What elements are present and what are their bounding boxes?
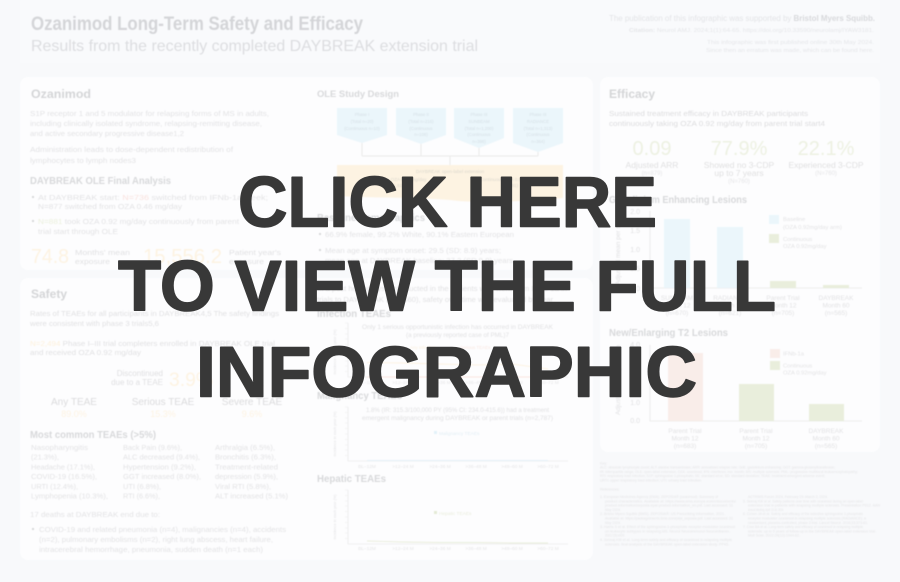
line chart: malignancy TEAEs: >24–36 M: [429, 464, 451, 470]
line chart: malignancy TEAEs: >36–48 M: [465, 464, 487, 470]
text: analysis bullets: trial start through OLE: [38, 227, 118, 236]
line chart: infection TEAEs: Serious TEAEs: [460, 345, 491, 350]
heading: infection TEAEs: Infection TEAEs: [317, 309, 391, 320]
bar labels: RADIANCE: [713, 295, 747, 302]
line chart: hepatic TEAEs: Incidence in each year (%): [333, 494, 337, 539]
heading: Safety: Safety: [31, 287, 67, 301]
bar labels: Month 12: [769, 302, 797, 310]
text: TEAE rates: Rates of TEAEs for all participants in DAYBREAK4,5 The safety findings: [30, 309, 279, 318]
publication note: This infographic was first published online 30th May 2024.: [707, 40, 875, 46]
line chart: infection TEAEs: >48–60 M: [501, 380, 523, 386]
line chart: malignancy TEAEs: [333, 407, 568, 470]
stat: adjusted ARR: Adjusted ARR: [626, 160, 678, 170]
bar chart: new/enlarging T2 lesions: 2.0: [630, 380, 640, 387]
text: ozanimod description: Administration leads to dose-dependent redistribution of: [30, 145, 234, 154]
bar chart: gadolinium enhancing lesions: 1.5: [630, 228, 640, 235]
list: most common TEAEs: [31, 443, 288, 500]
call to action overlay: [118, 162, 776, 412]
phase III radiance box: RADIANCE: [527, 119, 549, 124]
stat: patient years exposure: 15,556.2: [143, 246, 222, 268]
bar chart: new/enlarging T2 lesions: 1.0: [630, 400, 640, 407]
text: post hoc analysis: trials to DAYBREAK (n=1,560), safety over time was evaluated by year: [317, 295, 554, 304]
bar labels: Parent Trial: [668, 428, 702, 435]
text: ozanimod description: including clinically isolated syndrome, relapsing-remitting disease,: [30, 119, 262, 128]
stat: months mean exposure: Months' mean: [75, 248, 130, 257]
text: TEAE rates: [29, 309, 279, 357]
footnotes: references: sclerosis: final analysis of the DAYBREAK open-label extension study. PP45.: [605, 542, 729, 546]
bar chart: new/enlarging T2 lesions: 3.0: [630, 361, 640, 368]
phase III radiance box: [513, 108, 563, 152]
overlay line 2: TO VIEW THE FULL: [118, 246, 776, 326]
overlay line 3: INFOGRAPHIC: [196, 332, 697, 412]
legend: [770, 349, 827, 376]
list: most common TEAEs: UTI (6.8%),: [123, 482, 161, 491]
stat: no 3-CDP: 77.9%: [711, 138, 768, 160]
bar chart: gadolinium enhancing lesions: 2.0: [630, 209, 640, 216]
stat: serious TEAE: Serious TEAE: [132, 397, 195, 408]
footnotes: references: Available at: https://packageinserts.bms.com/pi/pi_zeposia.pdf. Last accessed: 31: [605, 516, 733, 520]
text: deaths: intracerebral hemorrhage, pneumonia, sudden death (n=1 each): [39, 545, 263, 554]
list: most common TEAEs: ALC decreased (9.4%),: [123, 452, 200, 462]
line chart: infection TEAEs: >36–48 M: [465, 380, 487, 386]
line chart: malignancy TEAEs: Incidence in each year (%): [333, 411, 337, 456]
DAYBREAK extension box: DAYBREAK open-label extension: [416, 169, 485, 174]
bar chart: new/enlarging T2 lesions: Adjusted mean per scan: [615, 345, 622, 415]
heading: Ozanimod: Ozanimod: [31, 87, 91, 101]
stat: experienced 3-CDP: 22.1%: [798, 138, 855, 160]
bar chart: gadolinium enhancing lesions: Adjusted mean per scan: [615, 215, 622, 285]
heading: malignancy TEAEs: Malignancy TEAEs: [317, 391, 402, 402]
list: most common TEAEs: Lymphopenia (10.3%),: [31, 492, 108, 500]
stat: any TEAE: [51, 397, 97, 419]
line chart: hepatic TEAEs: BL–12M: [358, 546, 376, 552]
text: efficacy summary: [609, 109, 825, 128]
stat: experienced 3-CDP: [788, 138, 864, 177]
bar labels: [668, 428, 844, 450]
bar chart: new/enlarging T2 lesions: 0.0: [630, 418, 640, 425]
phase I box: Phase I: [355, 112, 369, 117]
stat: serious TEAE: [132, 397, 195, 419]
text: efficacy summary: Sustained treatment efficacy in DAYBREAK participants: [609, 109, 808, 118]
phase III box: [454, 108, 504, 148]
bar chart: gadolinium enhancing lesions: 0.0: [630, 286, 640, 293]
phase III radiance box: (Continuous: [526, 132, 550, 137]
line chart: hepatic TEAEs: >36–48 M: [465, 546, 487, 552]
text: demographics bullets: mean age at DAYBREAK baseline: 37.2 (SD 9.0) years: [325, 256, 513, 265]
stat: no 3-CDP: up to 7 years: [714, 168, 764, 178]
legend: (OZA 0.92mg/day arm): [783, 225, 842, 231]
phase III box: n=398): [472, 139, 486, 144]
footnotes: references: Mult Scler. 2022;28(12):1944-62.: [748, 534, 800, 538]
phase II box: Phase II: [413, 112, 429, 117]
line chart: hepatic TEAEs: [333, 490, 568, 552]
panel: Ozanimod and OLE study design: [20, 77, 593, 270]
stat: serious TEAE: 15.3%: [150, 409, 176, 419]
text: analysis bullets: N=881 took OZA 0.92 mg/day continuously from parent: [38, 217, 239, 226]
footnotes: key: URTI: upper respiratory tract infection; UTI: urinary tract infection.: [600, 478, 702, 482]
heading: hepatic TEAEs: Hepatic TEAEs: [317, 474, 386, 485]
stat: severe TEAE: 9.6%: [242, 409, 262, 419]
citation: Citation: Neurol AMJ. 2024;1(1):64-65. https://doi.org/10.33590/neurolamj/IYAW3181.: [629, 28, 875, 34]
legend: Continuous: [783, 237, 812, 243]
line chart: malignancy TEAEs: BL–12M: [358, 464, 376, 470]
heading: DAYBREAK OLE final analysis: DAYBREAK OLE Final Analysis: [30, 176, 171, 187]
phase I box: (Continuous n=10): [344, 126, 380, 131]
legend: OZA 0.92mg/day: [783, 244, 827, 250]
list: most common TEAEs: ALT increased (5.1%): [215, 492, 288, 500]
text: ozanimod description: lymphocytes to lymph nodes3: [30, 156, 136, 165]
legend: OZA 0.92mg/day: [783, 370, 827, 376]
footnotes: references: extension trial in patients with relapsing multiple sclerosis. Presentation P012. AAN: [748, 504, 880, 508]
phase III box: SUNBEAM: [468, 119, 490, 124]
text: infection note: [362, 324, 554, 339]
phase III radiance box: (Total n=1,313): [524, 126, 553, 131]
footnotes: key: [600, 462, 858, 482]
footnotes: references: 4. Selmaj KW et al. Long-term safety and efficacy of ozanimod in relapsing multiple: [600, 538, 732, 542]
bar labels: DAYBREAK: [809, 428, 844, 435]
list: most common TEAEs: GGT increased (8.0%),: [123, 472, 201, 481]
footnotes: references: May 2024.: [605, 521, 621, 525]
phase III box: (Total n=1,200): [465, 126, 494, 131]
sponsor note: The publication of this infographic was supported by Bristol Myers Squibb.: [609, 14, 875, 23]
text: demographics bullets: [319, 230, 514, 265]
bar labels: Month 12: [742, 436, 770, 442]
footnotes: references: product characteristics. Available at: https://www.ema.europa.eu/en/documents/: [605, 499, 736, 503]
list: most common TEAEs: COVID-19 (16.5%),: [31, 472, 97, 481]
text: analysis bullets: [32, 193, 268, 236]
footnotes: references: receptor modulator ozanimod in relapsing multiple sclerosis (RADIANCE): a: [748, 516, 866, 520]
line chart: infection TEAEs: Incidence in each year (%): [333, 329, 337, 374]
stat: months mean exposure: 74.8: [31, 246, 69, 268]
stat: adjusted ARR: [626, 138, 678, 177]
flow diagram: study design: [337, 108, 563, 202]
text: malignancy note: emergent malignancy during DAYBREAK or parent trials (n=2,787): [362, 415, 553, 422]
bar labels: Month 12: [716, 302, 744, 310]
DAYBREAK extension box: [337, 165, 563, 202]
stat: no 3-CDP: (N=760): [728, 179, 750, 185]
text: ozanimod description: [30, 109, 269, 165]
line chart: hepatic TEAEs: >60–72 M: [537, 546, 559, 552]
line chart: infection TEAEs: BL–12M: [358, 380, 376, 386]
line chart: infection TEAEs: >12–24 M: [392, 380, 414, 386]
heading: Efficacy: Efficacy: [609, 87, 655, 101]
phase II box: (Continuous: [409, 126, 433, 131]
stat: months mean exposure: [31, 246, 130, 268]
list: most common TEAEs: depression (5.9%),: [215, 472, 278, 481]
bar labels: (n=565): [815, 443, 837, 450]
footnotes: references: sclerosis: up to 5 years of follow-up in the DAYBREAK open-label extension trial.: [748, 529, 876, 533]
stat: discontinued due to TEAE: Discontinued: [117, 369, 163, 378]
text: TEAE rates: were consistent with phase 3 trials5,6: [29, 319, 159, 328]
DAYBREAK extension box: (n=881): [502, 183, 518, 188]
overlay line 1: CLICK HERE: [238, 162, 657, 242]
footnotes: references: References:: [600, 488, 619, 492]
stat: discontinued due to TEAE: due to a TEAE: [111, 378, 163, 387]
line chart: hepatic TEAEs: >24–36 M: [429, 546, 451, 552]
line chart: malignancy TEAEs: >60–72 M: [537, 464, 559, 470]
phase III radiance box: Phase III: [530, 112, 546, 117]
list: most common TEAEs: Arthralgia (6.5%),: [215, 443, 275, 452]
stat: severe TEAE: Severe TEAE: [222, 397, 283, 408]
footnotes: references: 1. European Medicines Agency (EMA). ZEPOSIA® (ozanimod): Summary of: [600, 495, 718, 499]
list: most common TEAEs: Bronchitis (6.3%),: [215, 452, 276, 462]
panel: Efficacy: [600, 77, 880, 452]
footnotes: references: 6. Cohen JA et al. Safety and efficacy of the selective sphingosine 1-phosphate: [743, 512, 863, 516]
phase I box: (Total n=20): [351, 119, 374, 124]
heading: gadolinium enhancing lesions: Gadolinium Enhancing Lesions: [609, 195, 747, 206]
phase II box: n=108): [414, 132, 428, 137]
legend: [769, 215, 842, 250]
bar labels: Parent Trial: [766, 295, 800, 302]
legend: IFNb-1a: [783, 352, 805, 358]
text: deaths: COVID-19 and related pneumonia (n=4), malignancies (n=4), accidents: [39, 525, 286, 534]
footnotes: key: Key:: [600, 462, 607, 466]
footnotes: references: Annual Meeting, April 13-18, 2024.: [748, 508, 784, 512]
text: deaths: 17 deaths at DAYBREAK end due to:: [30, 510, 160, 519]
bar labels: Month 12: [663, 302, 691, 310]
footnotes: references: on leukocyte subtypes in relapsing MS. Neurol Neuroimmunol Neuroinflamm.: [605, 529, 730, 533]
stat: months mean exposure: exposure: [75, 257, 110, 266]
subtitle: Results from the recently completed DAYBREAK extension trial: [31, 38, 478, 55]
heading: new/enlarging T2 lesions: New/Enlarging T2 Lesions: [609, 328, 728, 339]
footnotes: references: product-information/zeposia-epar-product-information_en.pdf. Last accessed: 31: [605, 504, 733, 508]
stat: any TEAE: Any TEAE: [51, 397, 97, 408]
line chart: infection TEAEs: Any infection: [410, 345, 436, 350]
text: deaths: [30, 510, 286, 554]
stat: discontinued due to TEAE: 3.9%: [169, 370, 213, 391]
footnotes: references: ACTRIMS Forum 2024, February 29–March 2, 2024.: [748, 495, 828, 499]
footnotes: key: ALC: absolute lymphocyte count; ALT: alanine transaminase; ARR: annualised relapse rate; GdE: gadolinium-enhancing; GGT: gamma-glutamyltransferase;: [600, 466, 835, 470]
heading: baseline demographics: Baseline Demographics: [317, 213, 425, 224]
phase III radiance box: n=364): [531, 139, 545, 144]
list: most common TEAEs: RTI (6.6%),: [123, 492, 160, 500]
stat: experienced 3-CDP: (N=760): [815, 171, 837, 177]
footnotes: references: randomised, placebo-controlled, phase 3 trial. Lancet Neurol. 2016;15:373-81.: [748, 521, 868, 525]
footnotes: references: 7. Cree BA et al. Long-term safety and efficacy of ozanimod in relapsing multiple: [743, 525, 863, 529]
stat: adjusted ARR: (n=879): [642, 171, 662, 177]
stat: experienced 3-CDP: Experienced 3-CDP: [788, 160, 864, 170]
DAYBREAK extension box: Switched to OZA 0.92 mg/day: [366, 177, 427, 182]
bar labels: (n=705): [745, 443, 767, 450]
bar chart: gadolinium enhancing lesions: 1.0: [630, 247, 640, 254]
phase II box: (Total n=216): [408, 119, 434, 124]
text: malignancy note: [362, 407, 553, 422]
stat: no 3-CDP: Showed no 3-CDP: [704, 160, 775, 170]
panel: Safety: [20, 278, 593, 560]
list: most common TEAEs: Nasopharyngitis: [31, 443, 88, 452]
bar labels: [661, 295, 854, 317]
phase I box: [337, 108, 387, 143]
legend: Baseline: [783, 217, 805, 223]
line chart: malignancy TEAEs: >48–60 M: [501, 464, 523, 470]
text: post hoc analysis: In a post hoc analysis conducted in the patients who went from IFNb-1a in: [317, 284, 567, 293]
stat: patient years exposure: [143, 246, 281, 268]
list: most common TEAEs: Hypertension (9.2%),: [123, 462, 196, 472]
heading: most common TEAEs: Most common TEAEs (>5%): [30, 430, 156, 441]
line chart: malignancy TEAEs: >12–24 M: [392, 464, 414, 470]
bar labels: DAYBREAK: [819, 295, 854, 302]
stat: patient years exposure: exposure: [229, 257, 264, 266]
text: TEAE rates: and received OZA 0.92 mg/day: [30, 348, 141, 357]
text: ozanimod description: S1P receptor 1 and 5 modulator for relapsing forms of MS in adults,: [30, 109, 269, 118]
bar labels: (n=565): [825, 310, 847, 317]
line chart: infection TEAEs: >24–36 M: [429, 380, 451, 386]
text: demographics bullets: 66.9% female, 99.2% White, 90.1% Eastern European: [325, 230, 514, 239]
text: efficacy summary: continuously taking OZA 0.92 mg/day from parent trial start4: [609, 119, 825, 128]
line chart: hepatic TEAEs: >12–24 M: [392, 546, 414, 552]
footnotes: references: 3. Harris S et al. Effect of the sphingosine-1-phosphate receptor modulator ozanimod: [600, 525, 735, 529]
list: most common TEAEs: (21.3%),: [31, 452, 59, 462]
stat: patient years exposure: Patient year's: [229, 248, 281, 257]
bar chart: gadolinium enhancing lesions: [615, 209, 862, 317]
stat: severe TEAE: [222, 397, 283, 419]
text: TEAE rates: N=2,494 Phase I–III trial completers enrolled in DAYBREAK OLE trial: [30, 339, 275, 348]
stat: discontinued due to TEAE: [111, 369, 213, 391]
text: post hoc analysis: [317, 284, 567, 304]
list: most common TEAEs: Headache (17.1%),: [31, 462, 95, 472]
DAYBREAK extension box: (N=1,613): [386, 183, 407, 188]
text: deaths: (n=2), pulmonary embolisms (n=2), right lung abscess, heart failure,: [39, 535, 273, 544]
title: Ozanimod Long-Term Safety and Efficacy: [31, 14, 363, 35]
stat: any TEAE: 89.0%: [61, 409, 87, 419]
bar labels: Month 60: [822, 302, 850, 310]
footnotes: references: May 2024.: [605, 508, 621, 512]
bar labels: (n=683): [674, 443, 696, 450]
text: malignancy note: 1.8% (IR: 315.3/100,000 PY (95% CI: 234.0-415.6)) had a treatment: [366, 407, 549, 414]
DAYBREAK extension box: Continuous OZA 0.92 mg/day: [480, 177, 541, 182]
list: most common TEAEs: Back Pain (9.6%),: [123, 443, 182, 452]
line chart: malignancy TEAEs: Malignancy TEAEs: [439, 431, 480, 437]
bar labels: Month 60: [812, 436, 840, 442]
stat: no 3-CDP: [704, 138, 775, 185]
phase III box: (Continuous: [467, 132, 491, 137]
footnotes: references: 5. Selmaj KW et al. Safety patterns over time with ozanimod during an open-label: [743, 499, 863, 503]
heading: OLE study design: OLE Study Design: [317, 89, 399, 100]
list: most common TEAEs: Treatment-related: [215, 462, 278, 472]
stat: adjusted ARR: 0.09: [633, 138, 671, 160]
bar labels: Month 12: [671, 436, 699, 442]
list: most common TEAEs: Viral RTI (5.8%),: [215, 482, 271, 491]
bar chart: gadolinium enhancing lesions: 0.5: [630, 266, 640, 273]
bar labels: Parent Trial: [739, 428, 773, 435]
text: infection note: Only 1 serious opportunistic infection has occurred in DAYBREAK: [362, 324, 554, 331]
bar chart: new/enlarging T2 lesions: [615, 342, 862, 450]
legend: Continuous: [783, 364, 812, 370]
phase II box: [396, 108, 446, 144]
line chart: hepatic TEAEs: Hepatic TEAEs: [439, 511, 472, 517]
header band: [20, 0, 880, 63]
bar labels: SUNBEAM: [661, 295, 693, 302]
erratum note: Since then an erratum was made, which can be found here.: [706, 48, 875, 54]
list: most common TEAEs: URTI (12.4%),: [31, 482, 78, 491]
bar labels: (n=621): [719, 310, 741, 317]
line chart: infection TEAEs: >60–72 M: [537, 380, 559, 386]
text: analysis bullets: N=877 switched from OZA 0.46 mg/day: [38, 202, 182, 211]
footnotes: key: RTI: respiratory tract infection; S1P: sphingosine 1-phosphate; SE: standard error; SD: standard deviation; TEAE: treatment-emergent adverse event;: [600, 474, 825, 478]
footnotes: key: IR: interquartile range; OLE: open-label extension; OZA: ozanimod; IFN: interferon; mo: month; MS: multiple sclerosis; PML: progressive multifocal leukoencephalopathy;: [600, 470, 858, 474]
text: ozanimod description: and active secondary progressive disease1,2: [30, 129, 184, 138]
bar chart: new/enlarging T2 lesions: 4.0: [630, 342, 640, 349]
phase III box: Phase III: [471, 112, 487, 117]
bar labels: (n=705): [772, 310, 794, 317]
footnotes: references: 2. Bristol Myers Squibb (BMS). ZEPOSIA®: US Prescribing Information. 2021.: [600, 512, 725, 516]
line chart: hepatic TEAEs: >48–60 M: [501, 546, 523, 552]
text: demographics bullets: Mean age at symptom onset: 29.5 (SD: 8.9) years;: [325, 246, 501, 255]
text: analysis bullets: At DAYBREAK start: N=736 switched from IFNb-1a/week;: [38, 193, 268, 202]
bar labels: (n=670): [666, 310, 688, 317]
footnotes: references: [600, 488, 880, 546]
footnotes: references: 2020;7(5):e839.: [605, 534, 625, 538]
line chart: infection TEAEs: [333, 323, 568, 386]
text: infection note: (a previously reported case of PML)7: [406, 332, 510, 339]
